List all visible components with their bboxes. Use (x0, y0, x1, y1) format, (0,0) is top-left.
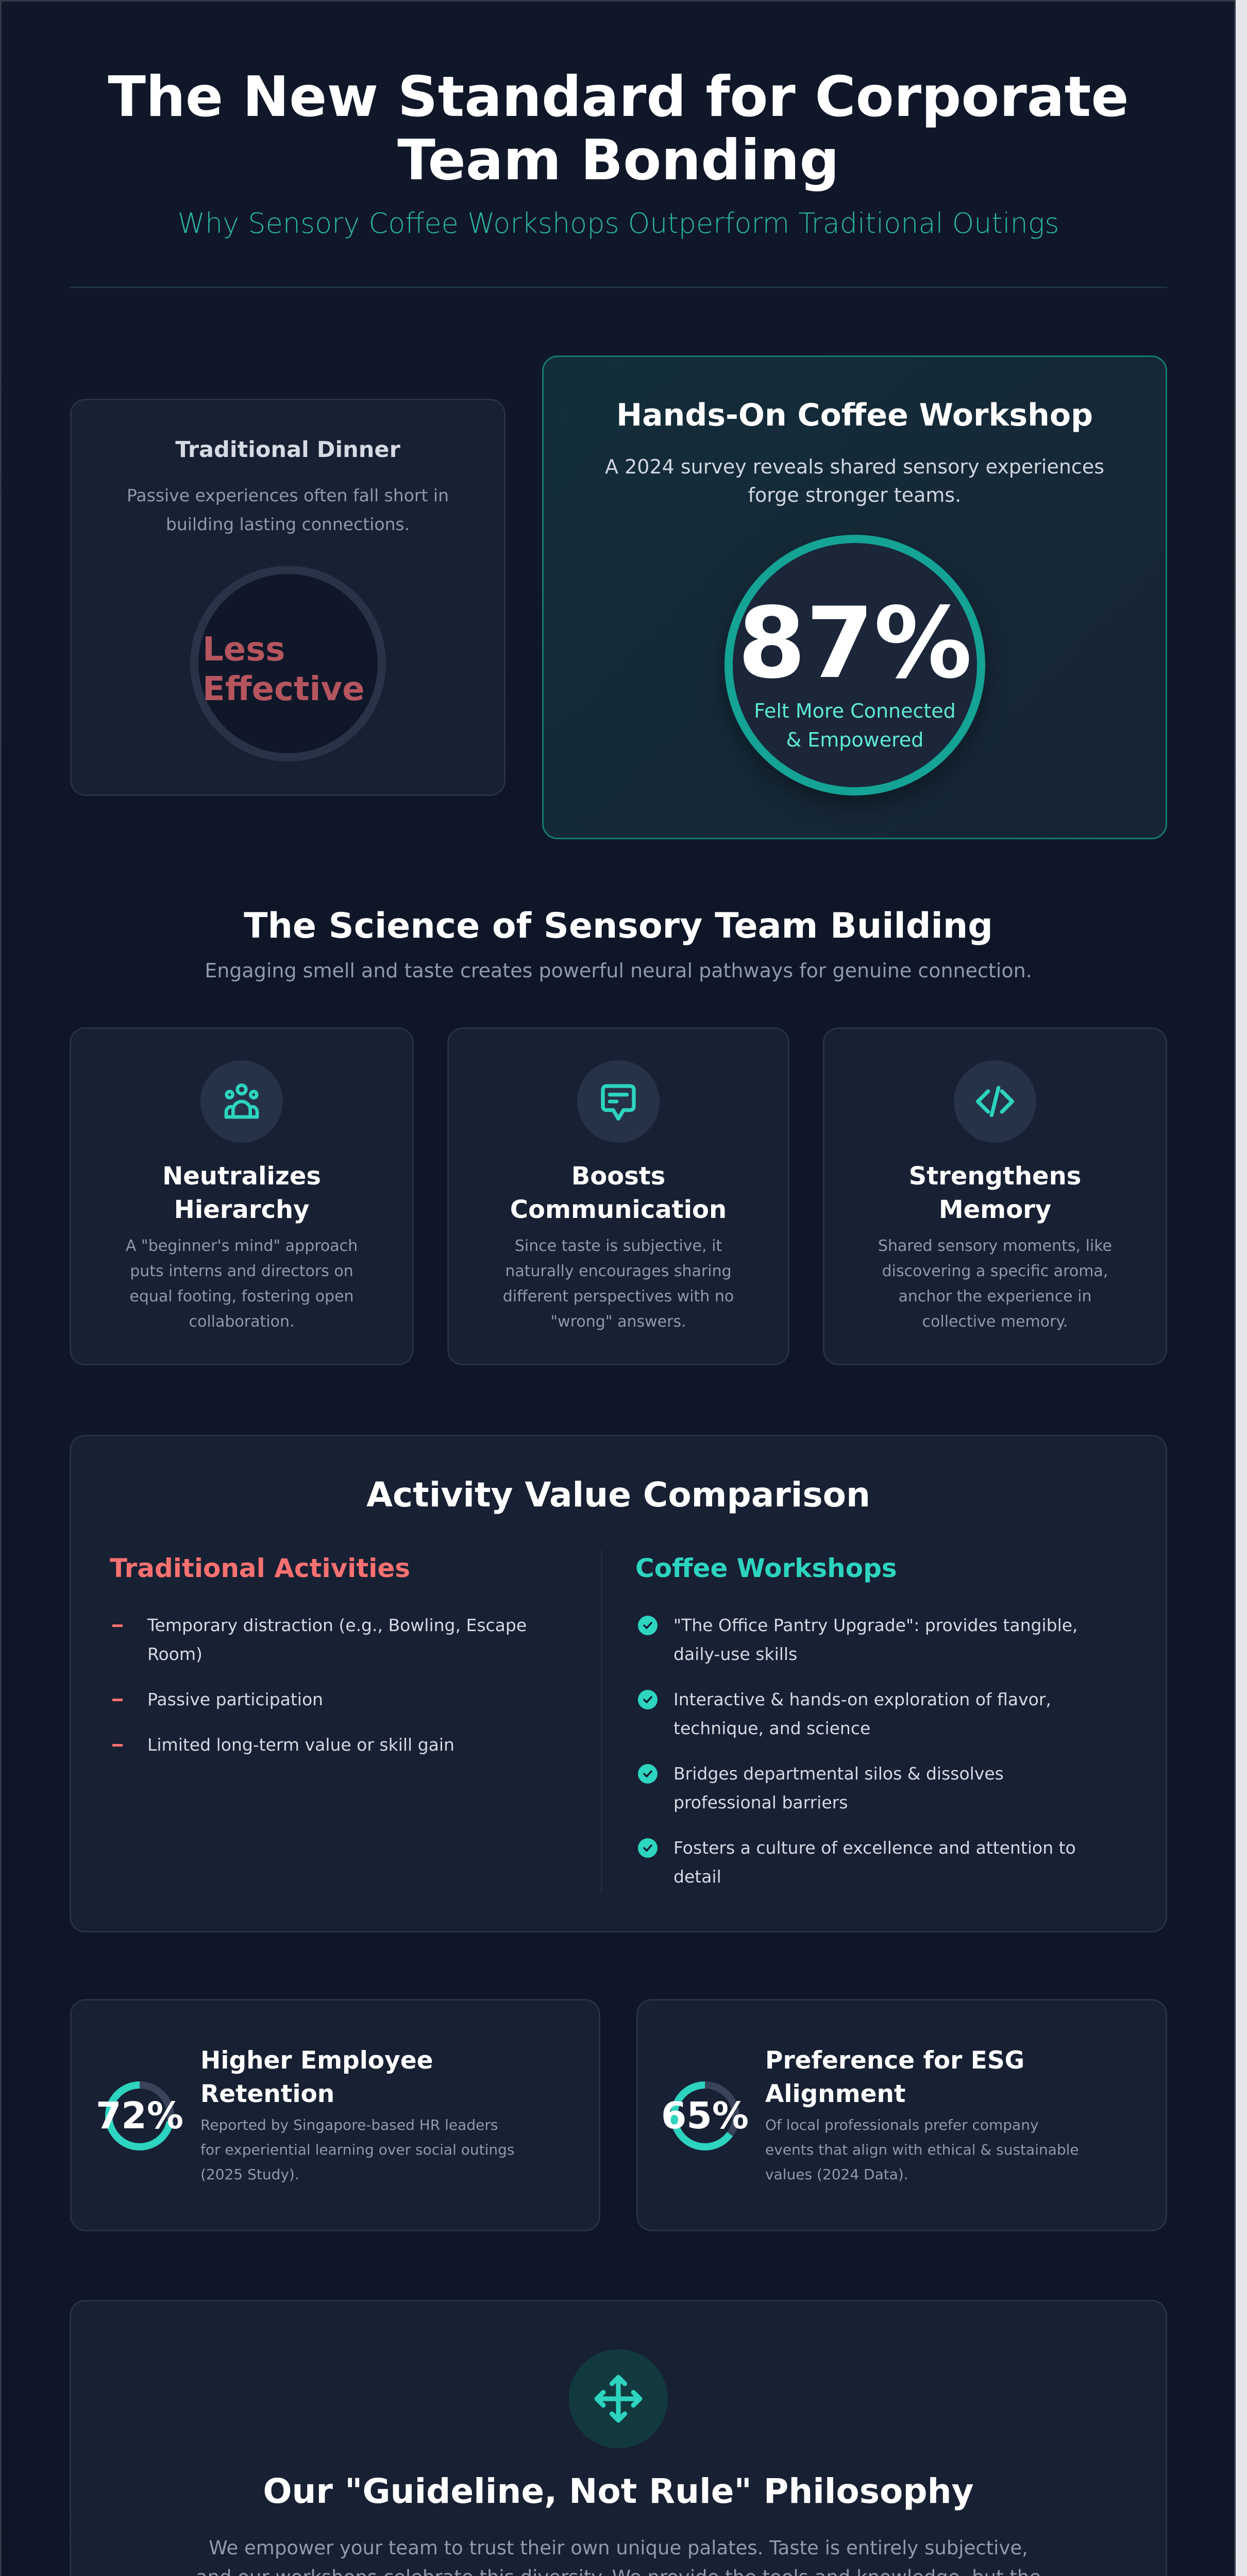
text: shared moments: discovering a specific aroma, (882, 1262, 1108, 1280)
text: taste subjective (503, 1237, 734, 1331)
heading: ESG: Preference for ESG (765, 2046, 1024, 2075)
panel: strengthens memory (823, 1027, 1167, 1365)
panel: philosophy (70, 2300, 1167, 2576)
panel: neutralizes hierarchy (70, 1027, 414, 1365)
text: retention desc: Reported by Singapore-based HR leaders (200, 2116, 498, 2133)
panel: boosts communication (447, 1027, 789, 1365)
text: shared moments: collective memory. (922, 1313, 1068, 1331)
heading: science: The Science of Sensory Team Building (244, 906, 993, 946)
text: passive experiences: building lasting connections. (166, 514, 410, 534)
heading: neutralizes hierarchy (162, 1162, 321, 1224)
heading: strengthens memory: Strengthens (909, 1162, 1081, 1191)
text: survey (605, 455, 1104, 506)
heading: comparison: Activity Value Comparison (366, 1475, 870, 1515)
heading: boosts communication (510, 1162, 727, 1224)
label: felt more connected: & Empowered (786, 728, 923, 751)
text: beginner's mind: puts interns and directors on (130, 1262, 353, 1280)
icon: less effective circle: Effective (203, 670, 365, 708)
panel: retention stat (70, 1999, 600, 2231)
item: temporary distraction: Temporary distraction (e.g., Bowling, Escape (147, 1615, 527, 1635)
item: limited value: Limited long-term value or skill gain (147, 1735, 454, 1755)
text: ESG desc (765, 2113, 1147, 2187)
item: pantry upgrade: daily-use skills (673, 1644, 797, 1664)
item: interactive: Interactive & hands-on exploration of flavor, (673, 1689, 1051, 1709)
label: felt more connected (754, 700, 956, 751)
item: culture (638, 1838, 1076, 1887)
text: taste subjective: Since taste is subjective, it (515, 1237, 722, 1255)
icon: people (200, 1060, 283, 1143)
panel: activity value comparison (70, 1435, 1167, 1933)
item: culture: Fosters a culture of excellence and attention to (673, 1838, 1076, 1858)
text: passive experiences (127, 485, 449, 534)
text: taste subjective: "wrong" answers. (550, 1313, 686, 1331)
item: interactive (638, 1689, 1051, 1738)
heading: traditional dinner: Traditional Dinner (175, 437, 400, 463)
icon: code brackets (954, 1060, 1036, 1143)
text: passive experiences: Passive experiences often fall short in (127, 485, 449, 505)
heading: neutralizes hierarchy: Hierarchy (174, 1195, 309, 1224)
stat: 72%: 72% (96, 2094, 183, 2137)
chart: 72% ring (96, 2081, 183, 2150)
list: traditional (112, 1615, 527, 1755)
icon: chat (577, 1060, 660, 1143)
heading: ESG: Alignment (765, 2080, 905, 2108)
text: survey: A 2024 survey reveals shared sensory experiences (605, 455, 1104, 478)
label: felt more connected: Felt More Connected (754, 700, 956, 722)
icon: move arrows (569, 2349, 668, 2448)
text: beginner's mind (126, 1237, 358, 1331)
item: pantry upgrade (638, 1615, 1078, 1664)
chart: 87% circle (724, 535, 985, 795)
panel: coffee workshop (542, 355, 1167, 839)
heading: coffee workshops: Coffee Workshops (635, 1553, 897, 1583)
heading: retention: Higher Employee (200, 2046, 433, 2075)
text: retention desc: for experiential learning over social outings (200, 2141, 515, 2158)
text: ESG desc: values (2024 Data). (765, 2166, 908, 2183)
text: survey: forge stronger teams. (748, 484, 961, 506)
text: shared moments (878, 1237, 1112, 1331)
item: temporary distraction: Room) (147, 1644, 203, 1664)
heading: philosophy: Our "Guideline, Not Rule" Philosophy (263, 2471, 974, 2511)
item: bridges silos: Bridges departmental silos & dissolves (673, 1764, 1004, 1784)
heading: boosts communication: Boosts (571, 1162, 665, 1191)
stat: 87%: 87% (738, 586, 972, 700)
text: shared moments: Shared sensory moments, like (878, 1237, 1112, 1255)
subtitle: Why Sensory Coffee Workshops Outperform Traditional Outings (178, 207, 1059, 240)
text: retention desc (200, 2116, 515, 2183)
text: philosophy body (71, 2533, 1166, 2576)
text: philosophy body: We empower your team to trust their own unique palates. Taste is entirely subjective, (209, 2537, 1028, 2559)
heading: retention (200, 2046, 433, 2108)
heading: traditional activities: Traditional Activities (110, 1553, 410, 1583)
heading: coffee workshop: Hands-On Coffee Workshop (616, 397, 1093, 433)
item: pantry upgrade: "The Office Pantry Upgrade": provides tangible, (673, 1615, 1078, 1635)
heading: neutralizes hierarchy: Neutralizes (162, 1162, 321, 1191)
icon: less effective circle (190, 566, 386, 761)
title: Team Bonding (397, 128, 839, 193)
text: beginner's mind: A "beginner's mind" approach (126, 1237, 358, 1255)
item: temporary distraction (112, 1615, 527, 1664)
text: taste subjective: different perspectives with no (503, 1287, 734, 1306)
heading: ESG (765, 2044, 1136, 2111)
panel: ESG stat (636, 1999, 1167, 2231)
item: bridges silos: professional barriers (673, 1792, 848, 1812)
chart: 65% ring (661, 2081, 749, 2150)
subtitle: science: Engaging smell and taste creates powerful neural pathways for genuine connection. (205, 959, 1032, 982)
item: passive: Passive participation (147, 1689, 323, 1709)
text: retention desc: (2025 Study). (200, 2166, 299, 2183)
icon: less effective circle: Less (203, 631, 285, 669)
item: culture: detail (673, 1867, 721, 1887)
heading: strengthens memory: Memory (939, 1195, 1051, 1224)
text: beginner's mind: equal footing, fostering open (129, 1287, 354, 1306)
list: coffee workshops (638, 1615, 1078, 1887)
item: bridges silos (638, 1764, 1004, 1812)
item: interactive: technique, and science (673, 1718, 870, 1738)
heading: retention: Retention (200, 2080, 334, 2108)
title: The New Standard for Corporate (108, 65, 1129, 129)
text: ESG desc: Of local professionals prefer company (765, 2116, 1039, 2133)
text: beginner's mind: collaboration. (189, 1313, 295, 1331)
heading: strengthens memory (909, 1162, 1081, 1224)
text: ESG desc: events that align with ethical & sustainable (765, 2141, 1079, 2158)
text: shared moments: anchor the experience in (898, 1287, 1092, 1306)
heading: boosts communication: Communication (510, 1195, 727, 1224)
text: taste subjective: naturally encourages sharing (505, 1262, 732, 1280)
stat: 65%: 65% (661, 2094, 749, 2137)
title (108, 65, 1129, 193)
panel: traditional dinner (70, 399, 505, 796)
